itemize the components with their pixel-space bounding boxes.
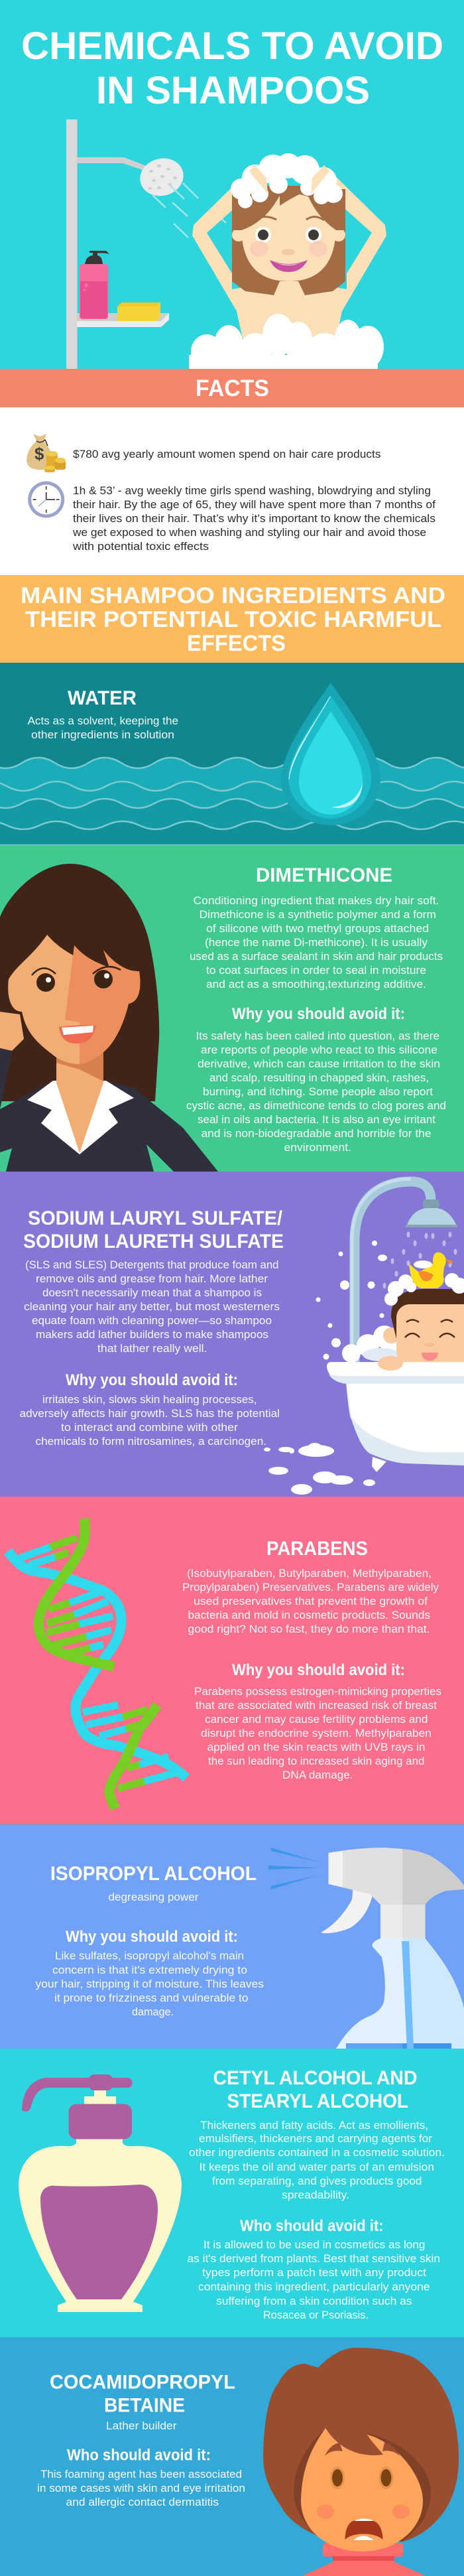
text: sls description — [24, 1258, 280, 1355]
text: dimethicone description: to coat surfaces in order to seal in moisture — [206, 964, 426, 977]
text: weekly time: their lives on their hair. That’s why it’s important to know the chemicals — [73, 512, 435, 525]
heading: EFFECTS — [187, 631, 286, 656]
text: weekly time: with potential toxic effects — [72, 540, 209, 553]
panel: header — [0, 0, 464, 370]
heading: why avoid: Why you should avoid it: — [66, 1371, 238, 1389]
illustration: bathtub with boy — [327, 1253, 464, 1472]
icon: shower — [66, 119, 226, 369]
text: parabens reasons: Parabens possess estrogen-mimicking properties — [194, 1685, 441, 1698]
illustration: woman — [0, 864, 218, 1172]
text: cetyl description: other ingredients contained in a cosmetic solution. — [189, 2146, 445, 2159]
illustration: foam clouds — [264, 1443, 375, 1495]
panel: cetyl and stearyl alcohol — [0, 2049, 464, 2337]
text: dimethicone reasons: burning, and itching. Some people also report — [203, 1085, 433, 1098]
text: dimethicone description: Conditioning ingredient that makes dry hair soft. — [194, 894, 439, 907]
heading: cocamidopropyl betaine: COCAMIDOPROPYL — [50, 2371, 235, 2394]
text: cetyl description: from separating, and gives products good — [212, 2175, 422, 2187]
text: parabens reasons: applied on the skin reacts with UVB rays in — [207, 1741, 426, 1753]
panel: facts list — [0, 407, 464, 575]
text: parabens reasons: the sun leading to increased skin aging and — [208, 1755, 424, 1767]
text: parabens reasons: cancer and may cause fertility problems and — [205, 1713, 428, 1726]
text: sls description: makers add lather builders to make shampoos — [36, 1328, 268, 1341]
heading: who should avoid: Who should avoid it: — [240, 2217, 383, 2235]
text: parabens reasons — [194, 1685, 441, 1781]
text: sls reasons: to interact and combine with other — [61, 1421, 238, 1434]
heading: sls/sles: SODIUM LAURYL SULFATE/ — [28, 1207, 283, 1229]
text: cetyl reasons: containing this ingredient, particularly anyone — [198, 2281, 430, 2293]
heading: cocamidopropyl betaine — [50, 2371, 235, 2416]
panel: water — [0, 663, 464, 845]
text: sls description: (SLS and SLES) Detergents that produce foam and — [25, 1258, 278, 1271]
heading: sls/sles — [23, 1207, 284, 1253]
text: weekly time: we get exposed to when washing and styling our hair and avoid those — [72, 526, 426, 539]
text: dimethicone reasons: environment. — [284, 1141, 351, 1154]
text: cocamidopropyl reasons: and allergic contact dermatitis — [66, 2496, 219, 2508]
icon: water drop — [281, 683, 380, 825]
illustration: shower pipe — [352, 1179, 457, 1362]
text: weekly time: their hair. By the age of 65, they will have spent more than 7 months of — [73, 498, 435, 511]
text: dimethicone reasons: Its safety has been called into question, as there — [196, 1030, 439, 1042]
panel: main ingredients heading — [0, 575, 464, 663]
illustration: worried girl — [263, 2348, 459, 2576]
heading: cetyl and stearyl — [213, 2067, 418, 2112]
text: cetyl description: emulsifiers, thickeners and carrying agents for — [199, 2132, 432, 2145]
text: dimethicone description: and act as a smoothing,texturizing additive. — [206, 978, 426, 990]
text: dimethicone description: Dimethicone is a synthetic polymer and a form — [199, 908, 436, 921]
text: isopropyl reasons: concern is that it's extremely drying to — [52, 1964, 247, 1976]
text: dimethicone description: used as a surface sealant in skin and hair products — [190, 950, 443, 963]
text: parabens description: bacteria and mold in cosmetic products. Sounds — [188, 1609, 430, 1621]
icon: pump bottle — [19, 2074, 182, 2312]
title — [21, 25, 443, 112]
text: sls description: that lather really well. — [97, 1342, 207, 1355]
text: cetyl description: Thickeners and fatty acids. Act as emollients, — [200, 2119, 428, 2132]
text: sls reasons: chemicals to form nitrosamines, a carcinogen. — [36, 1435, 266, 1448]
text: parabens description: Propylparaben) Preservatives. Parabens are widely — [182, 1581, 439, 1593]
text: dimethicone reasons: derivative, which can cause irritation to the skin — [198, 1057, 440, 1070]
text: cetyl description: spreadability. — [282, 2189, 349, 2201]
heading: why avoid: Why you should avoid it: — [232, 1005, 405, 1023]
text: sls description: cleaning your hair any better, but most westerners — [24, 1300, 280, 1313]
heading — [21, 583, 445, 656]
panel: facts bar — [0, 369, 464, 407]
text: dimethicone description: of silicone with two methyl groups attached — [206, 922, 429, 935]
text: isopropyl reasons: your hair, stripping it of moisture. This leaves — [36, 1978, 264, 1990]
heading: cetyl and stearyl: CETYL ALCOHOL AND — [213, 2067, 418, 2089]
text: cetyl reasons: suffering from a skin condition such as — [216, 2295, 412, 2307]
text: cetyl reasons: as it's derived from plants. Best that sensitive skin — [187, 2252, 440, 2265]
panel: sodium lauryl sulfate — [0, 1172, 464, 1497]
text: cetyl reasons — [187, 2238, 440, 2321]
text: water description: Acts as a solvent, keeping the — [28, 714, 178, 727]
text: dimethicone reasons: seal in oils and bacteria. It is also an eye irritant — [198, 1113, 435, 1126]
heading: facts: FACTS — [196, 375, 269, 401]
heading: dimethicone: DIMETHICONE — [256, 864, 392, 886]
text: isopropyl reasons: damage. — [132, 2005, 174, 2018]
text: parabens description: used preservatives that prevent the growth of — [194, 1595, 428, 1607]
text: cetyl description — [189, 2119, 445, 2201]
text: sls reasons — [20, 1393, 280, 1448]
panel: isopropyl alcohol — [0, 1824, 464, 2049]
heading: who should avoid: Who should avoid it: — [67, 2447, 211, 2464]
text: isopropyl reasons: Like sulfates, isopropyl alcohol's main — [55, 1949, 244, 1962]
text: parabens reasons: DNA damage. — [282, 1769, 353, 1781]
illustration: foam on head — [231, 153, 343, 208]
illustration: bath foam — [189, 314, 384, 370]
text: cetyl reasons: types perform a patch test with any product — [202, 2266, 426, 2279]
icon: shampoo bottle and sponge on shelf — [77, 251, 169, 327]
icon: clock — [28, 482, 64, 517]
text: cetyl description: It keeps the oil and water parts of an emulsion — [199, 2161, 434, 2173]
text: isopropyl reasons: it prone to frizziness and vulnerable to — [54, 1992, 248, 2004]
heading: why avoid: Why you should avoid it: — [66, 1928, 238, 1946]
text: parabens reasons: disrupt the endocrine system. Methylparaben — [201, 1727, 432, 1739]
text: sls description: equate foam with cleaning power—so shampoo — [32, 1314, 272, 1327]
text: cetyl reasons: Rosacea or Psoriasis. — [263, 2309, 369, 2321]
text: isopropyl reasons — [36, 1949, 264, 2018]
text: dimethicone reasons: are reports of people who react to this silicone — [201, 1044, 437, 1056]
icon: spray bottle — [268, 1848, 464, 2049]
heading: sls/sles: SODIUM LAURETH SULFATE — [23, 1231, 284, 1253]
illustration: girl washing hair — [192, 165, 386, 338]
text: dimethicone reasons: and is non-biodegradable and horrible for the — [202, 1127, 431, 1140]
text: sls description: remove oils and grease from hair. More lather — [36, 1272, 268, 1285]
illustration: hands in foam — [249, 165, 329, 194]
text: cocamidopropyl reasons: This foaming agent has been associated — [40, 2468, 242, 2480]
text: dimethicone reasons — [186, 1030, 446, 1154]
text: weekly time: 1h & 53’ - avg weekly time girls spend washing, blowdrying and styling — [73, 484, 431, 497]
text: sls reasons: irritates skin, slows skin healing processes, — [42, 1393, 257, 1406]
heading: parabens: PARABENS — [266, 1538, 368, 1560]
text: sls description: doesn't necessarily mean that a shampoo is — [42, 1286, 262, 1299]
text: cocamidopropyl reasons — [37, 2468, 245, 2508]
text: sls reasons: adversely affects hair growth. SLS has the potential — [20, 1407, 280, 1420]
text: dimethicone reasons: cystic acne, as dimethicone tends to clog pores and — [186, 1099, 446, 1112]
heading: cetyl and stearyl: STEARYL ALCOHOL — [227, 2090, 408, 2112]
heading: THEIR POTENTIAL TOXIC HARMFUL — [25, 607, 441, 632]
text: water description — [28, 714, 178, 741]
heading: cocamidopropyl betaine: BETAINE — [104, 2395, 185, 2416]
icon: money bag — [27, 434, 66, 472]
text: cocamidopropyl reasons: in some cases with skin and eye irritation — [37, 2482, 245, 2494]
heading: isopropyl alcohol: ISOPROPYL ALCOHOL — [50, 1863, 257, 1885]
icon: dna helix — [8, 1519, 186, 1808]
icon: money bag: $ — [34, 444, 44, 464]
text: dimethicone description — [190, 894, 443, 990]
text: yearly amount: $780 avg yearly amount women spend on hair care products — [73, 448, 380, 460]
title: CHEMICALS TO AVOID — [21, 25, 443, 68]
heading: water: WATER — [68, 687, 137, 709]
illustration: waves — [0, 758, 464, 845]
text: dimethicone reasons: and scalp, resulting in chapped skin, rashes, — [209, 1071, 429, 1084]
text: parabens description: (Isobutylparaben, Butylparaben, Methylparaben, — [187, 1567, 432, 1580]
text: dimethicone description: (hence the name Di-methicone). It is usually — [205, 936, 428, 949]
text: weekly time — [72, 484, 435, 553]
title: IN SHAMPOOS — [96, 69, 370, 112]
panel: cocamidopropyl betaine — [0, 2337, 464, 2576]
text: cetyl reasons: It is allowed to be used in cosmetics as long — [203, 2238, 426, 2251]
panel: dimethicone — [0, 845, 464, 1172]
text: lather builder: Lather builder — [106, 2419, 177, 2432]
text: parabens reasons: that are associated with increased risk of breast — [196, 1699, 437, 1712]
heading: why avoid: Why you should avoid it: — [232, 1661, 405, 1679]
illustration: soap bubbles — [316, 1241, 387, 1360]
text: water description: other ingredients in solution — [31, 728, 174, 741]
text: parabens description: good right? Not so fast, they do more than that. — [188, 1623, 430, 1635]
text: parabens description — [182, 1567, 439, 1635]
text: degreasing power: degreasing power — [109, 1891, 199, 1903]
heading: MAIN SHAMPOO INGREDIENTS AND — [21, 583, 445, 608]
panel: parabens — [0, 1497, 464, 1824]
